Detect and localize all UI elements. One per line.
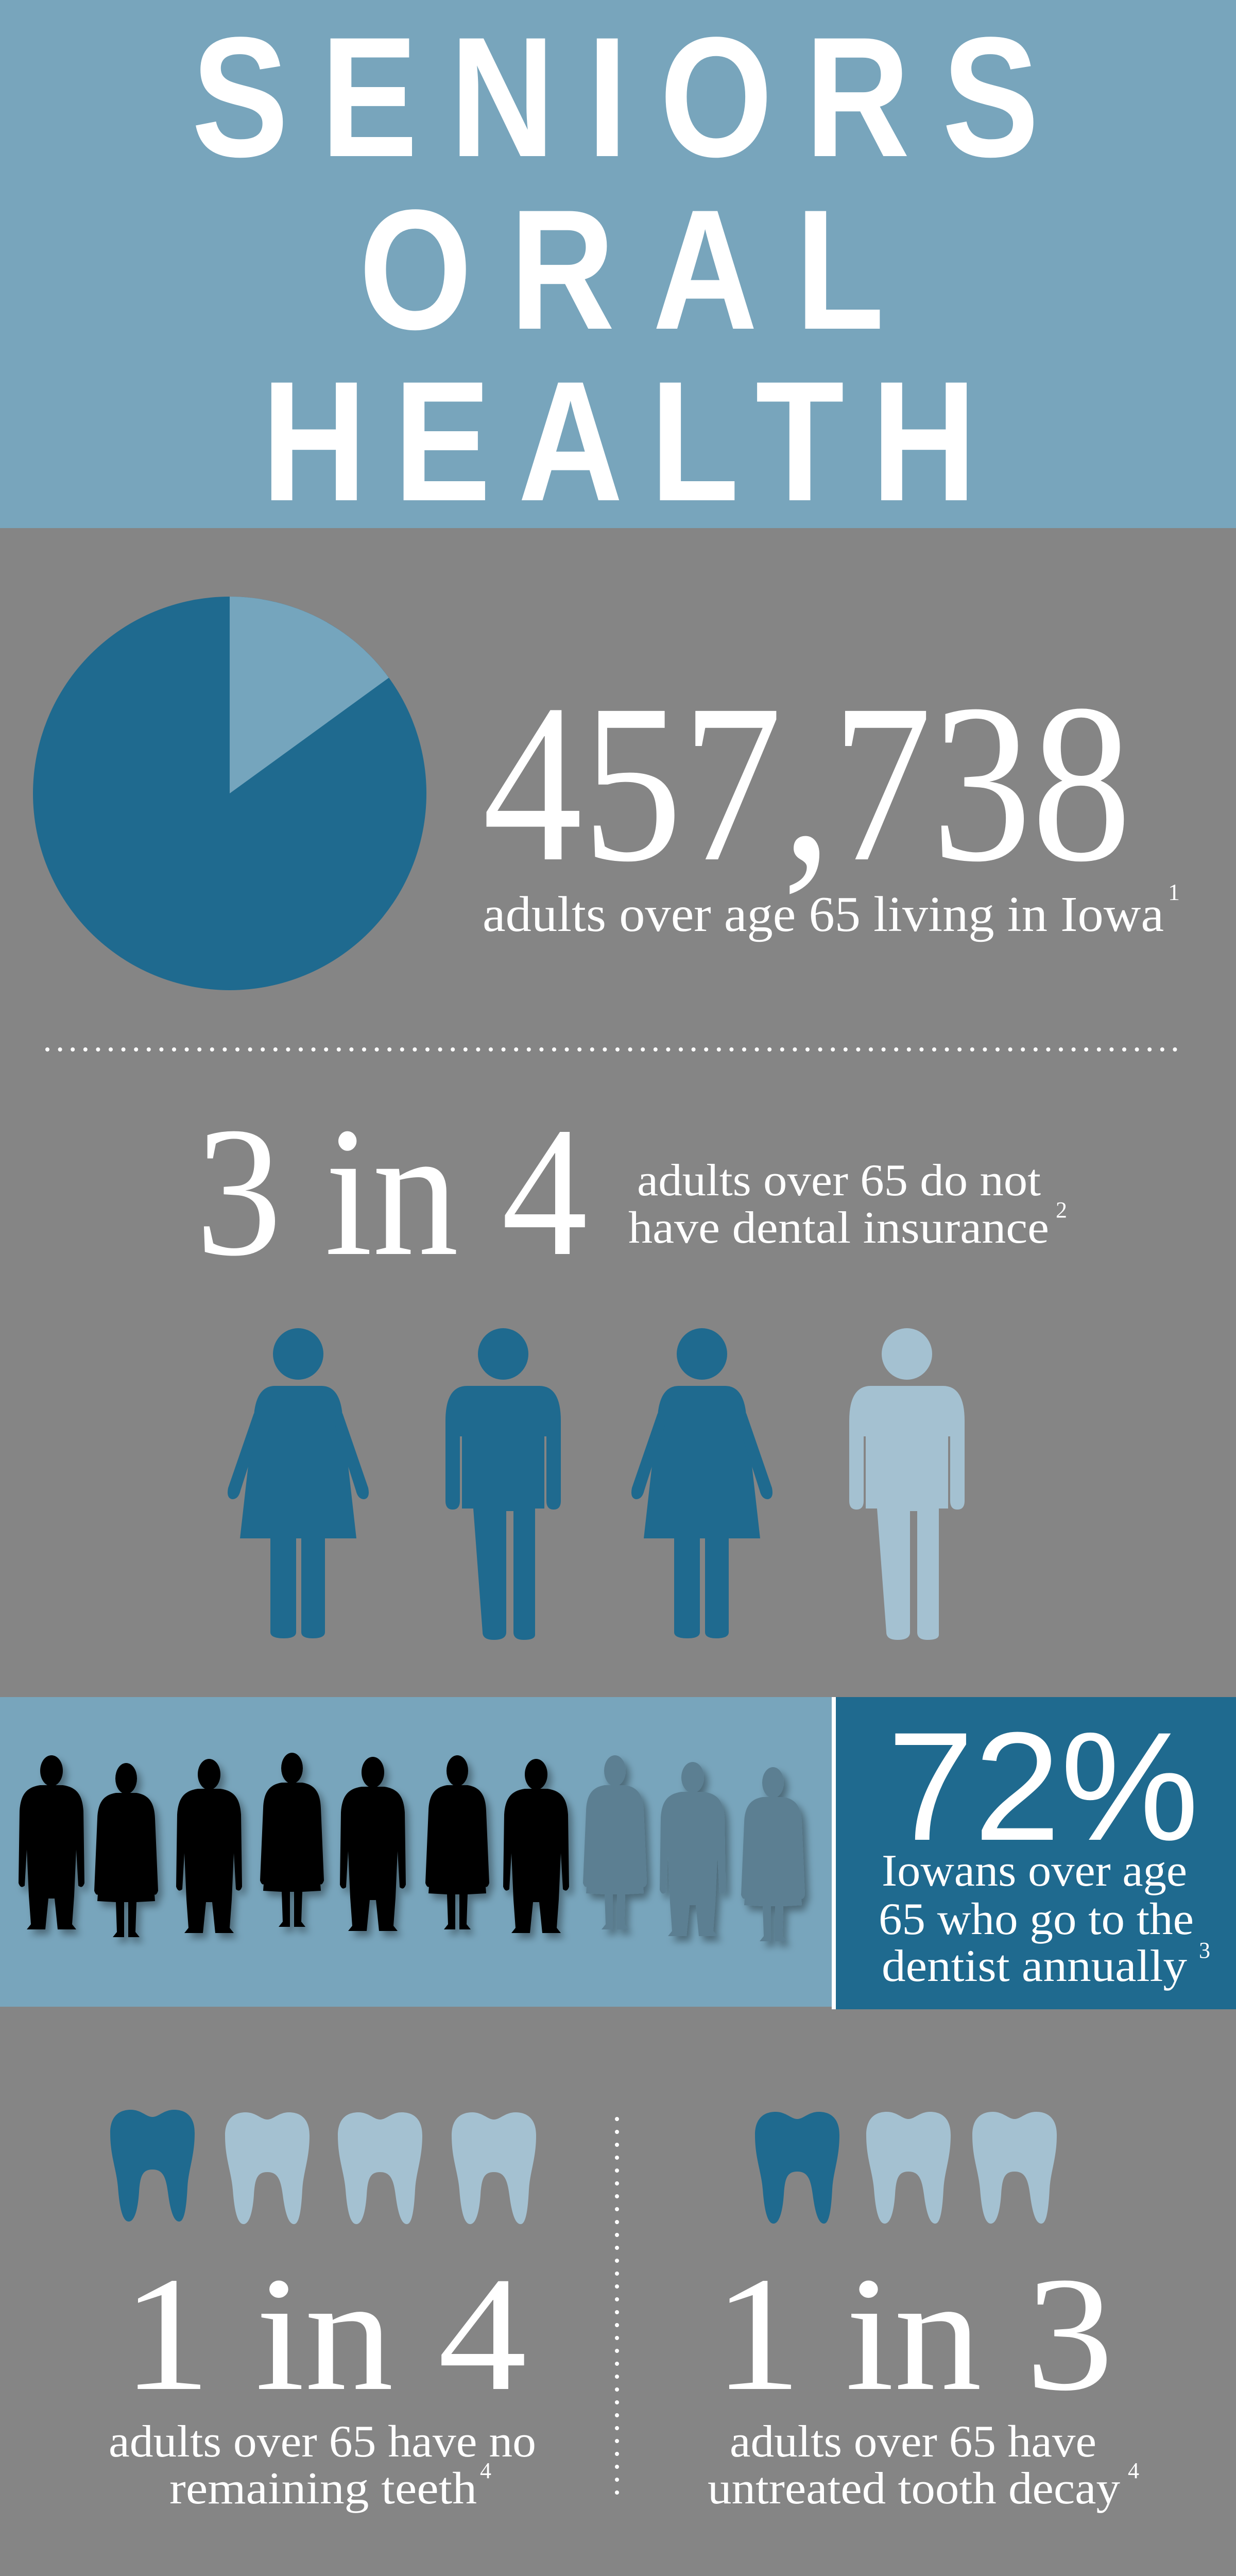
title: SENIORS — [192, 2, 1039, 193]
icons: teeth 1 in 3 — [755, 2112, 1057, 2224]
stat: 1 in 4 — [109, 2243, 536, 2514]
stat: 3 in 4 — [196, 1089, 1067, 1294]
stat: 72%: 72% — [887, 1700, 1199, 1873]
icons: people (3 of 4 highlighted) — [228, 1328, 965, 1640]
caption: adults over 65 in Iowa: adults over age 65 living in Iowa — [483, 887, 1164, 942]
stat: 3 in 4: 3 in 4 — [196, 1089, 588, 1294]
title — [192, 2, 1039, 537]
caption: dentist annually: Iowans over age — [882, 1846, 1187, 1896]
stat: 3 in 4: 2 — [1056, 1197, 1067, 1223]
title: HEALTH — [262, 346, 976, 537]
caption: no dental insurance: adults over 65 do not — [637, 1156, 1041, 1206]
caption: dentist annually — [879, 1846, 1210, 1991]
icons: teeth 1 in 4 — [110, 2110, 536, 2224]
stat: 1 in 4: 4 — [480, 2458, 491, 2483]
title band — [0, 0, 1236, 537]
stat: 457,738: 1 — [1168, 879, 1180, 905]
stat: 1 in 3: 4 — [1128, 2458, 1139, 2483]
stat: 1 in 3: 1 in 3 — [714, 2243, 1113, 2425]
stat: 3 in 4: have dental insurance — [628, 1203, 1049, 1253]
divider dotted — [47, 1047, 1187, 1052]
caption: dentist annually: 65 who go to the — [879, 1894, 1194, 1944]
stat: 457,738: 457,738 — [483, 658, 1131, 909]
caption: untreated tooth decay: adults over 65 have — [730, 2417, 1096, 2467]
stat: 1 in 4: 1 in 4 — [122, 2243, 527, 2425]
pie chart: seniors share — [33, 597, 426, 990]
silhouettes of seniors — [19, 1753, 805, 1941]
caption: dentist annually: 3 — [1199, 1938, 1210, 1963]
caption: dentist annually: dentist annually — [882, 1941, 1187, 1991]
stat: 1 in 4: remaining teeth — [169, 2464, 477, 2514]
stat: 1 in 3: untreated tooth decay — [708, 2464, 1120, 2514]
band: dentist visits — [0, 1697, 1236, 2009]
title: ORAL — [359, 174, 884, 365]
caption: no remaining teeth: adults over 65 have no — [109, 2417, 536, 2467]
stat: 1 in 3 — [708, 2243, 1139, 2514]
vertical dotted divider — [615, 2119, 619, 2503]
